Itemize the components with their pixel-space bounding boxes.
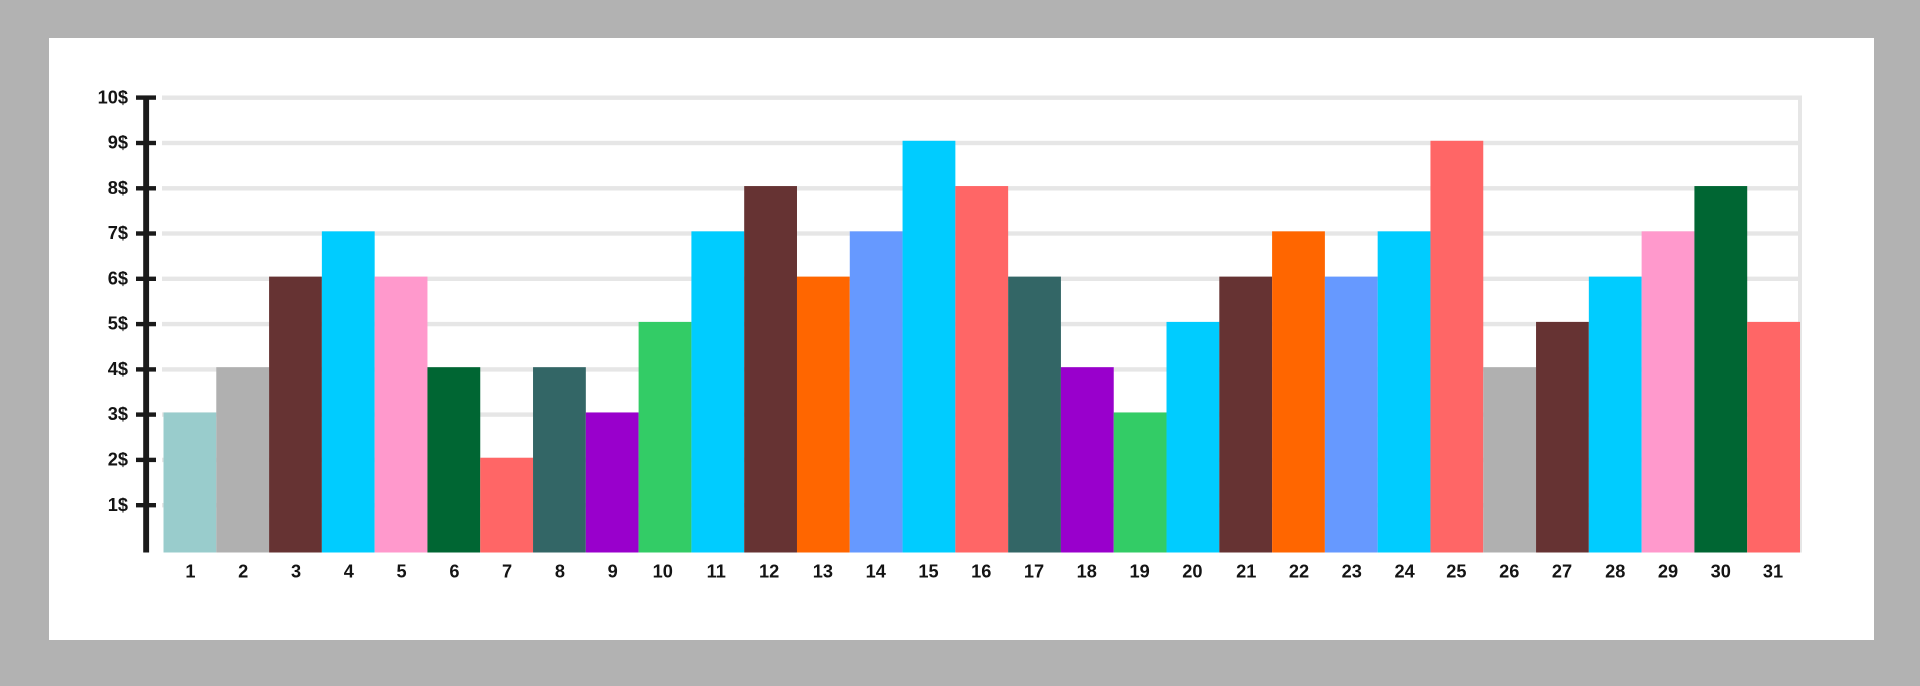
chart: x axis labels: 18 [1077,562,1097,582]
chart: x axis labels: 29 [1658,562,1678,582]
chart: y axis labels [98,87,128,515]
chart: x axis labels: 14 [866,562,887,582]
chart: x axis labels: 16 [971,562,991,582]
chart: x axis labels: 27 [1552,562,1572,582]
chart: x axis labels: 20 [1182,562,1203,582]
chart: x axis labels: 1 [185,562,195,582]
chart: x axis labels: 25 [1446,562,1467,582]
chart: x axis labels: 9 [608,562,618,582]
chart: y axis labels: 4$ [108,359,128,379]
chart: x axis labels: 5 [397,562,407,582]
chart: y axis labels: 1$ [108,495,128,515]
chart: x axis labels: 23 [1342,562,1362,582]
chart: x axis labels: 7 [502,562,512,582]
chart: y axis [136,95,156,553]
chart: y axis labels: 10$ [98,87,128,107]
chart: x axis labels: 10 [653,562,673,582]
chart: y axis labels: 6$ [108,268,128,288]
bar chart: daily values [164,141,1800,552]
chart: x axis labels: 8 [555,562,565,582]
chart: x axis labels: 4 [344,562,355,582]
chart: y axis labels: 2$ [108,450,128,470]
chart: x axis labels: 21 [1236,562,1256,582]
chart: x axis labels: 31 [1763,562,1783,582]
chart: y axis labels: 5$ [108,314,128,334]
chart: x axis labels: 19 [1129,562,1150,582]
chart: x axis labels: 13 [813,562,833,582]
chart: x axis labels: 3 [291,562,301,582]
chart: x axis labels: 2 [238,562,248,582]
chart: gridlines [162,96,1802,552]
chart: x axis labels: 22 [1289,562,1309,582]
chart: x axis labels: 11 [707,562,726,582]
chart: x axis labels: 15 [918,562,939,582]
chart: x axis labels: 24 [1394,562,1416,582]
chart: x axis labels: 28 [1605,562,1625,582]
chart: x axis labels: 30 [1711,562,1731,582]
chart: x axis labels: 6 [449,562,459,582]
chart: x axis labels: 26 [1499,562,1519,582]
chart: x axis labels: 17 [1024,562,1044,582]
chart: x axis labels: 12 [759,562,779,582]
chart: x axis labels [185,562,1783,582]
chart: y axis labels: 3$ [108,404,128,424]
chart: y axis labels: 7$ [108,223,128,243]
chart: y axis labels: 9$ [108,133,128,153]
chart: y axis labels: 8$ [108,178,128,198]
